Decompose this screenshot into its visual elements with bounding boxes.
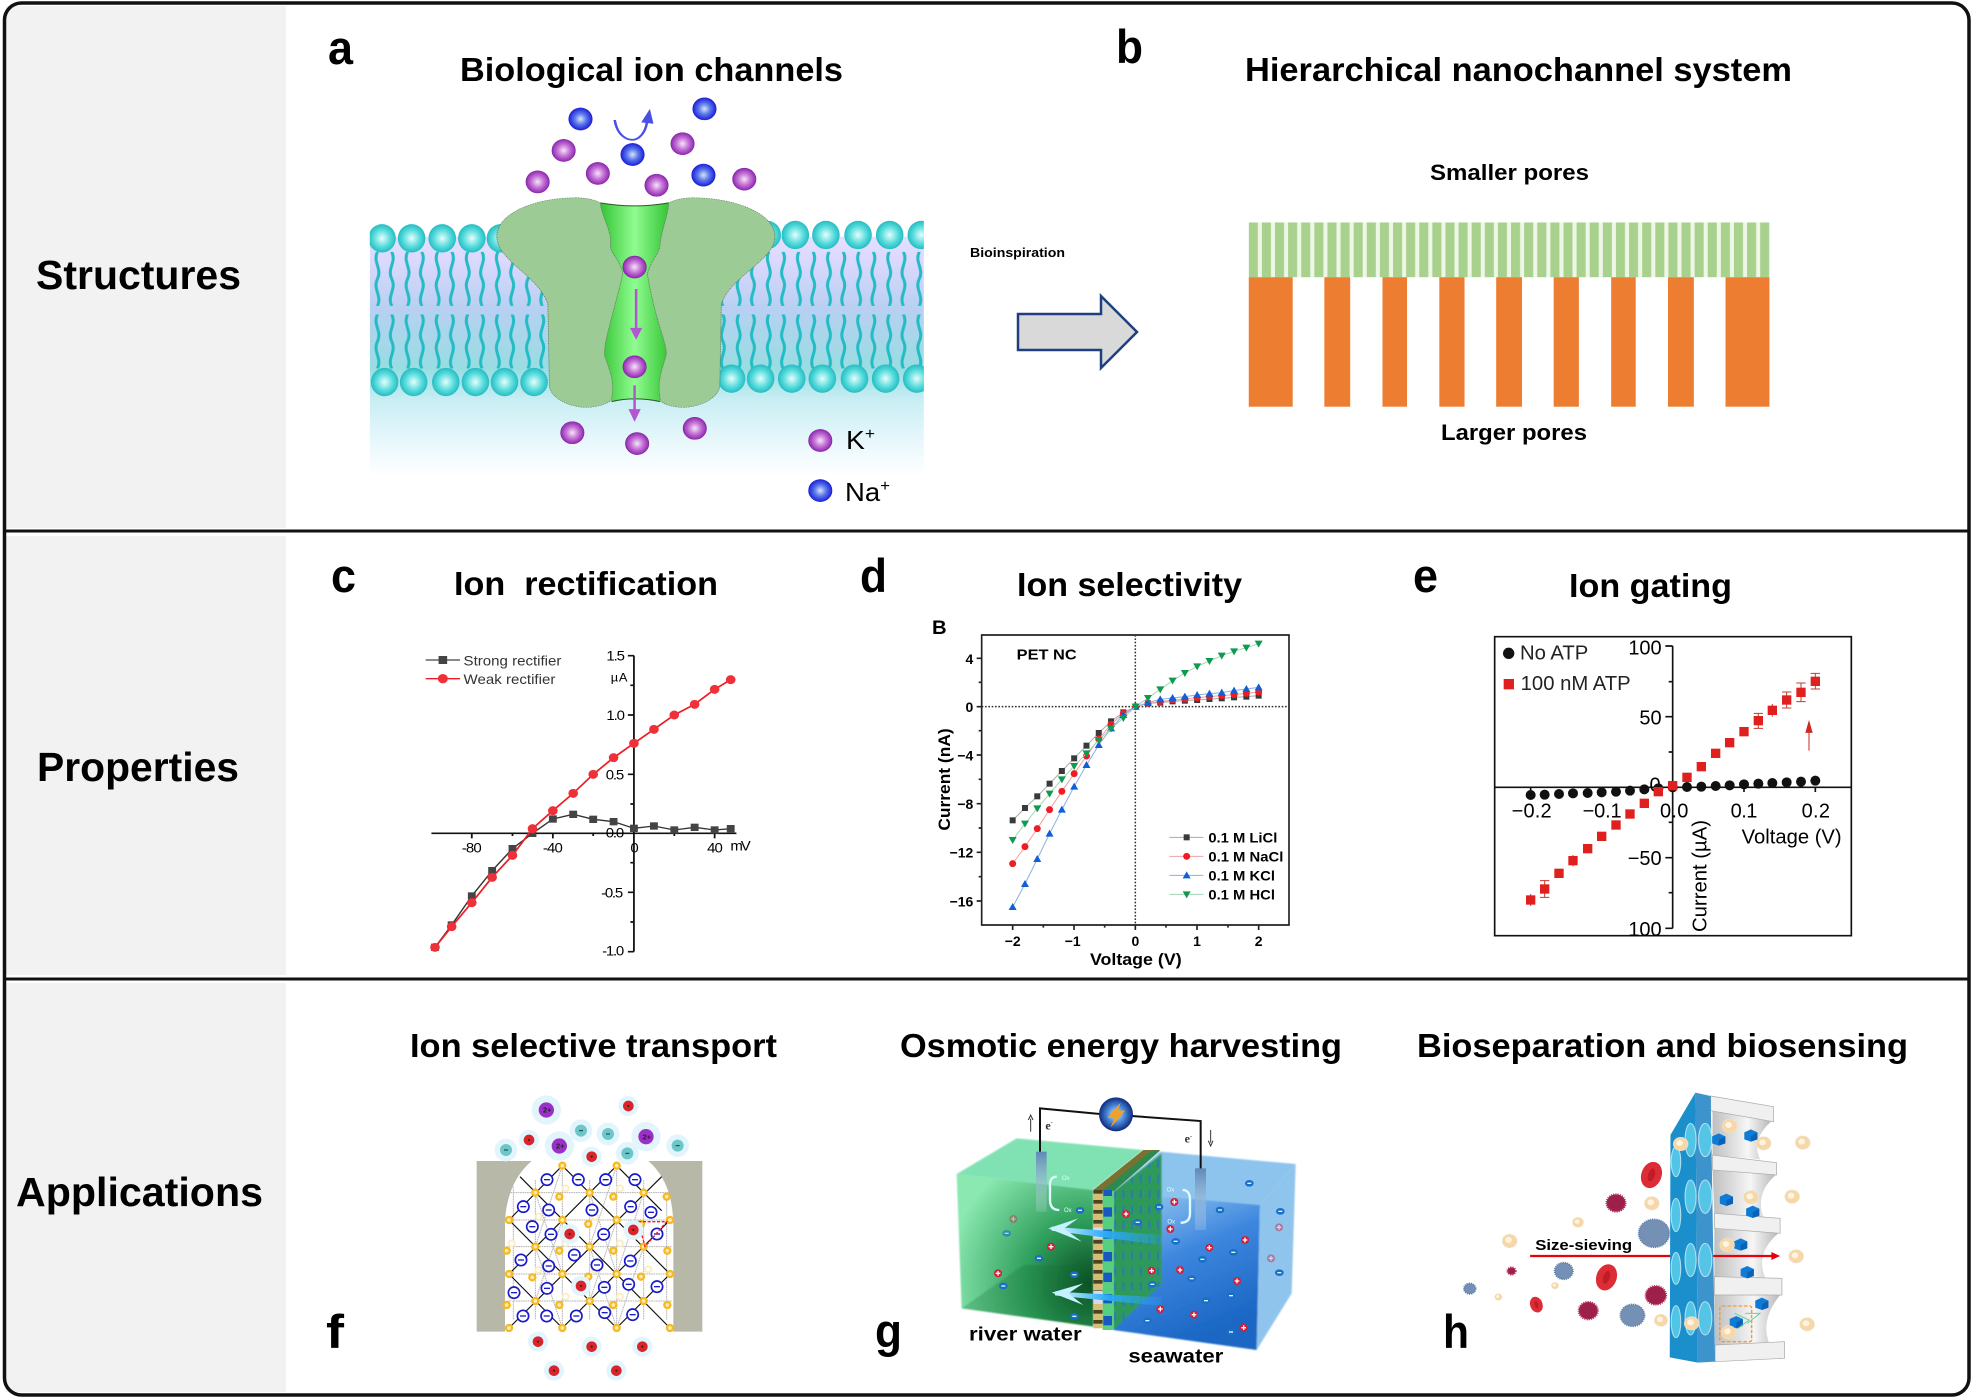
bioinspiration arrow and caption bbox=[970, 246, 1137, 368]
heading: hierarchical nanochannel system: Hierarchical nanochannel system bbox=[1245, 51, 1792, 88]
axis labels: −0.2 bbox=[1512, 800, 1552, 822]
heading: ion selectivity: Ion selectivity bbox=[1017, 566, 1243, 603]
axis tick labels: 0 bbox=[630, 841, 639, 857]
axis tick labels: 1.0 bbox=[606, 708, 625, 724]
axis labels: 0 bbox=[966, 699, 974, 715]
label: larger pores: Larger pores bbox=[1441, 420, 1587, 445]
line chart: rectifier currents bbox=[426, 649, 751, 960]
axis labels: 0 bbox=[1650, 775, 1661, 797]
series: weak rectifier bbox=[435, 680, 731, 947]
beige small molecules bbox=[1495, 1119, 1814, 1339]
legend labels K+ and Na+: Na bbox=[845, 477, 878, 507]
panel letter h: h bbox=[1443, 1305, 1469, 1358]
error bars bbox=[1531, 673, 1820, 906]
axis tick labels: mV bbox=[730, 839, 751, 855]
blue cube binding sites bbox=[1712, 1129, 1768, 1328]
axis tick labels: 1.5 bbox=[606, 649, 625, 665]
red sieving arrow bbox=[1530, 1252, 1780, 1260]
legend: 0.1 M KCl bbox=[1208, 868, 1275, 884]
axis tick labels bbox=[462, 649, 751, 960]
axis labels: −4 bbox=[957, 747, 974, 763]
legend: 0.1 M LiCl bbox=[1208, 830, 1277, 846]
axis labels: Voltage (V) bbox=[1090, 950, 1182, 969]
panel letter c: c bbox=[331, 549, 356, 602]
axis tick labels: -40 bbox=[543, 841, 563, 857]
axis labels: 1 bbox=[1193, 933, 1201, 949]
panel c: ion rectification bbox=[331, 549, 751, 960]
axis labels: −0.1 bbox=[1583, 800, 1622, 822]
hydrated ions bbox=[495, 1095, 689, 1381]
blue membrane column bbox=[1670, 1093, 1715, 1363]
lipid membrane bbox=[368, 221, 935, 477]
ions Na+ bbox=[569, 98, 832, 502]
scatter chart: ATP gating bbox=[1495, 637, 1851, 941]
electron labels: e bbox=[1045, 1118, 1051, 1132]
legend bbox=[1169, 830, 1283, 903]
panel d: ion selectivity bbox=[860, 549, 1289, 969]
redox arrows bbox=[1050, 1176, 1190, 1225]
electron labels bbox=[1028, 1115, 1213, 1146]
legend labels K+ and Na+ bbox=[845, 425, 890, 507]
diagram: size-sieving membrane bbox=[1464, 1093, 1814, 1363]
heading: osmotic energy harvesting: Osmotic energy harvesting bbox=[900, 1027, 1342, 1064]
series: 100 nM ATP bbox=[1531, 681, 1815, 900]
label: river water: river water bbox=[969, 1325, 1082, 1346]
row label: Applications: Applications bbox=[16, 1169, 263, 1215]
axis labels: 2 bbox=[1255, 933, 1263, 949]
plot frame and ticks bbox=[977, 635, 1289, 930]
membrane pores bbox=[1671, 1123, 1712, 1338]
axis labels: Current (nA) bbox=[935, 728, 954, 831]
black lattice diagonals bbox=[509, 1166, 670, 1328]
line chart: I-V curves by salt bbox=[932, 618, 1289, 969]
redox arrows: Ox bbox=[1062, 1176, 1070, 1182]
legend labels K+ and Na+: + bbox=[865, 426, 875, 443]
axis tick labels: µA bbox=[611, 671, 628, 685]
panel letter a: a bbox=[328, 21, 354, 74]
legend: No ATP bbox=[1520, 642, 1588, 664]
axis labels: 100 bbox=[1628, 919, 1662, 941]
negative charges bbox=[508, 1174, 663, 1322]
heading: ion rectification: Ion rectification bbox=[454, 565, 718, 602]
red blood cells bbox=[1528, 1160, 1665, 1314]
anions bbox=[999, 1180, 1285, 1335]
axis labels bbox=[935, 646, 1263, 969]
electron labels: e bbox=[1185, 1132, 1190, 1146]
axis tick labels: 0.0 bbox=[606, 826, 624, 841]
legend: 0.1 M HCl bbox=[1208, 887, 1275, 903]
axis labels: 0.0 bbox=[1660, 800, 1688, 822]
legend: 0.1 M NaCl bbox=[1208, 849, 1283, 865]
axis labels: −8 bbox=[957, 796, 974, 812]
axes bbox=[431, 656, 736, 952]
heading: ion selective transport: Ion selective transport bbox=[410, 1027, 777, 1064]
axis tick labels: 0.5 bbox=[606, 768, 624, 783]
block arrow bbox=[1018, 296, 1137, 368]
axis labels: −16 bbox=[950, 893, 974, 909]
pore walls bbox=[477, 1161, 702, 1332]
axis labels: 0.1 bbox=[1731, 800, 1757, 822]
red dashed unit triangle bbox=[638, 1222, 667, 1247]
channel protein bbox=[497, 198, 775, 407]
electrodes bbox=[1036, 1152, 1206, 1230]
axis labels: −12 bbox=[950, 845, 974, 861]
panel g: osmotic energy harvesting bbox=[875, 1027, 1342, 1367]
orange large-pore layer bbox=[1249, 277, 1769, 407]
axis tick labels: -1.0 bbox=[602, 944, 624, 960]
series: NaCl bbox=[1013, 692, 1259, 864]
electron labels: - bbox=[1051, 1121, 1053, 1127]
sub-panel letter B: B bbox=[932, 618, 947, 639]
diagram: two-compartment cell bbox=[957, 1097, 1296, 1367]
legend: Strong rectifier bbox=[464, 654, 562, 670]
grey pore walls bbox=[1713, 1111, 1780, 1345]
row label: Properties: Properties bbox=[37, 744, 239, 790]
channel pore bbox=[600, 203, 669, 402]
icon: power source with lightning bolt bbox=[1099, 1097, 1133, 1131]
zero reference lines bbox=[982, 635, 1289, 925]
increase arrow bbox=[1806, 722, 1812, 751]
panel letter g: g bbox=[875, 1304, 902, 1357]
redox arrows: Ox bbox=[1064, 1208, 1072, 1214]
nanochannel membrane bbox=[1249, 222, 1769, 407]
axis labels: 0.2 bbox=[1802, 800, 1830, 822]
axis tick labels: -80 bbox=[462, 841, 482, 857]
external circuit bbox=[1040, 1108, 1201, 1168]
series: KCl bbox=[1013, 687, 1259, 907]
axis labels: PET NC bbox=[1017, 646, 1077, 663]
caption: bioinspiration: Bioinspiration bbox=[970, 246, 1065, 260]
panel letter e: e bbox=[1413, 549, 1438, 602]
thin grey lattice bonds bbox=[507, 1166, 672, 1328]
white shelves bbox=[1711, 1096, 1785, 1362]
ions K+ bbox=[526, 133, 832, 455]
axis labels: 50 bbox=[1639, 707, 1662, 729]
series: LiCl bbox=[1013, 696, 1259, 820]
biosensing detail inset bbox=[1720, 1306, 1760, 1342]
panel f: ion selective transport bbox=[326, 1027, 777, 1381]
green small-pore layer bbox=[1249, 222, 1769, 277]
heading: ion gating: Ion gating bbox=[1569, 567, 1732, 604]
plot frame and axes bbox=[1495, 637, 1851, 936]
metal nodes bbox=[504, 1163, 673, 1331]
axis labels: 0 bbox=[1131, 933, 1139, 949]
axis tick labels: 40 bbox=[707, 841, 723, 857]
heading: biological ion channels: Biological ion channels bbox=[460, 51, 843, 88]
redox arrows: Ox bbox=[1167, 1219, 1175, 1225]
axis labels bbox=[1512, 637, 1842, 941]
legend bbox=[426, 654, 562, 688]
ion transport arrows bbox=[615, 109, 653, 422]
axis labels: Current (µA) bbox=[1690, 820, 1712, 932]
nanofluidic membrane bbox=[1093, 1150, 1160, 1330]
legend: Weak rectifier bbox=[464, 672, 556, 688]
axis tick labels: -0.5 bbox=[601, 886, 623, 901]
panel e: ion gating bbox=[1413, 549, 1851, 941]
cations bbox=[994, 1198, 1283, 1332]
axis labels: Voltage (V) bbox=[1742, 826, 1842, 848]
legend labels K+ and Na+: + bbox=[880, 478, 890, 495]
axis labels: −1 bbox=[1065, 933, 1081, 949]
panel letter f: f bbox=[326, 1305, 344, 1358]
series: HCl bbox=[1013, 644, 1259, 840]
label: size-sieving: Size-sieving bbox=[1535, 1238, 1632, 1254]
label: smaller pores: Smaller pores bbox=[1430, 160, 1589, 185]
diagram: charged lattice in pore bbox=[477, 1095, 702, 1381]
series: strong rectifier bbox=[435, 814, 731, 947]
magenta spiky cells bbox=[1507, 1194, 1666, 1319]
axis labels: −2 bbox=[1005, 933, 1021, 949]
row label: Structures: Structures bbox=[36, 252, 241, 298]
axis labels: 100 bbox=[1628, 637, 1662, 659]
blue-grey spiky cells bbox=[1464, 1219, 1669, 1326]
series: no ATP bbox=[1531, 781, 1815, 795]
redox arrows: Ox bbox=[1167, 1187, 1174, 1193]
faint nodes bbox=[509, 1185, 651, 1300]
diagram: membrane and channel bbox=[368, 98, 935, 502]
legend: 100 nM ATP bbox=[1521, 673, 1631, 695]
axis labels: −50 bbox=[1628, 848, 1662, 870]
axis labels: 4 bbox=[966, 651, 974, 667]
panel letter d: d bbox=[860, 549, 887, 602]
panel letter b: b bbox=[1116, 20, 1143, 73]
legend labels K+ and Na+: K bbox=[846, 425, 863, 455]
panel b: hierarchical nanochannel system bbox=[1116, 20, 1792, 445]
legend bbox=[1503, 642, 1631, 695]
water tanks bbox=[957, 1138, 1296, 1350]
panel h: bioseparation and biosensing bbox=[1417, 1027, 1908, 1363]
panel a: biological ion channels bbox=[328, 21, 935, 507]
electron labels: - bbox=[1190, 1134, 1192, 1140]
sidebar: grey label column bbox=[6, 6, 286, 1392]
heading: bioseparation and biosensing: Bioseparation and biosensing bbox=[1417, 1027, 1908, 1064]
label: seawater: seawater bbox=[1128, 1346, 1224, 1367]
ion flow arrows bbox=[1048, 1218, 1162, 1306]
